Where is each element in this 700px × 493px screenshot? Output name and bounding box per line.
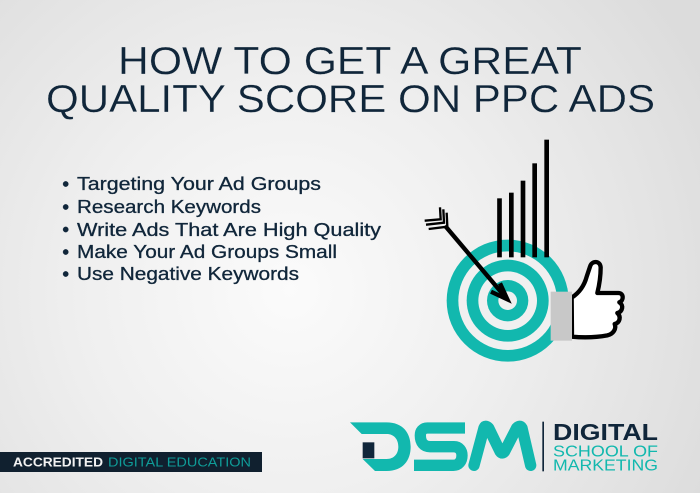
bullet list: Write Ads That Are High Quality: [77, 219, 382, 240]
bullet list: [63, 173, 382, 284]
bullet list: Research Keywords: [77, 196, 261, 217]
logo text: MARKETING: [553, 458, 658, 474]
logo text: SCHOOL OF: [553, 444, 658, 460]
logo text: DIGITAL: [553, 419, 658, 445]
banner: accredited digital education: [0, 452, 262, 472]
icon: target rings: [447, 240, 569, 362]
logo text: [553, 419, 658, 474]
icon: target with arrow, bars and thumbs up: [425, 140, 623, 362]
icon: thumbs up: [551, 262, 623, 341]
title: HOW TO GET A GREAT: [118, 40, 582, 83]
banner: accredited digital education: ACCREDITED: [13, 454, 103, 470]
logo mark: DSM: [350, 422, 531, 471]
icon: arrow: [425, 207, 507, 299]
logo: DSM Digital School of Marketing: [350, 422, 544, 471]
title: QUALITY SCORE ON PPC ADS: [46, 78, 655, 121]
title: [46, 40, 655, 121]
banner: accredited digital education: DIGITAL EDUCATION: [108, 454, 251, 470]
icon: rising bars: [497, 140, 549, 257]
bullet list: Use Negative Keywords: [77, 263, 299, 284]
bullet list: Targeting Your Ad Groups: [77, 173, 321, 194]
bullet list: Make Your Ad Groups Small: [77, 241, 337, 262]
